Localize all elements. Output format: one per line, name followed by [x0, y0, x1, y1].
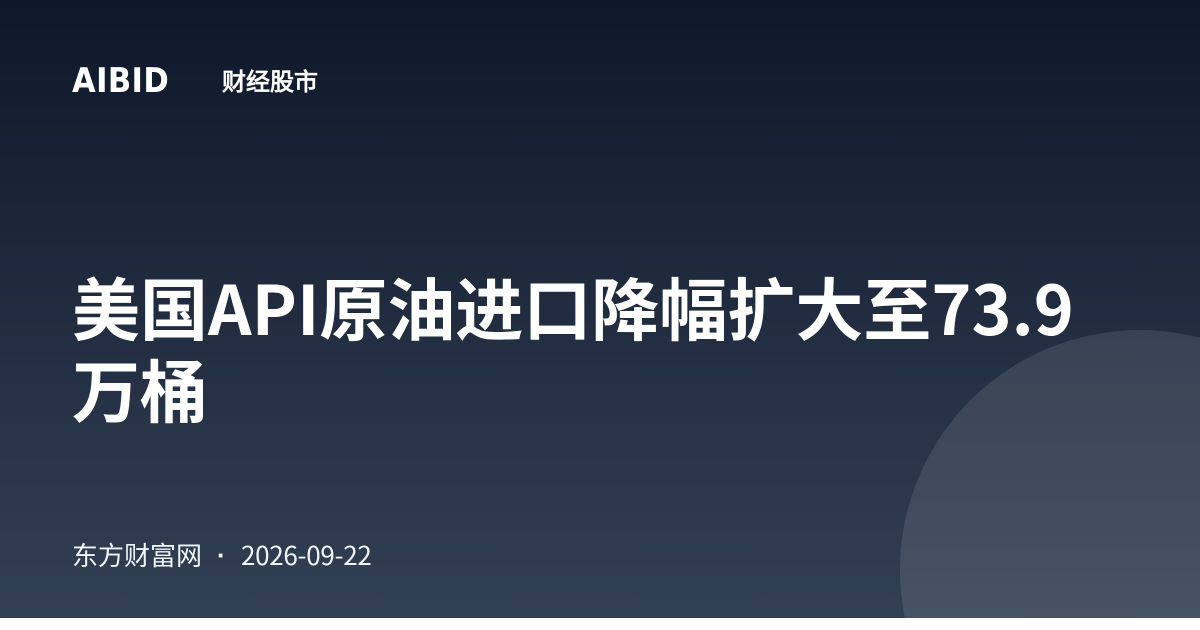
- source and date: [72, 536, 371, 573]
- brand name: AIBID: [72, 61, 169, 101]
- source and date: 东方财富网: [72, 536, 202, 573]
- panel: card background: 2026-09-22: [241, 536, 371, 573]
- panel: card background: ·: [217, 540, 226, 570]
- decorative circle: [900, 330, 1200, 630]
- title: 美国API原油进口降幅扩大至73.9万桶: [72, 256, 1074, 437]
- category tag: 财经股市: [222, 69, 318, 96]
